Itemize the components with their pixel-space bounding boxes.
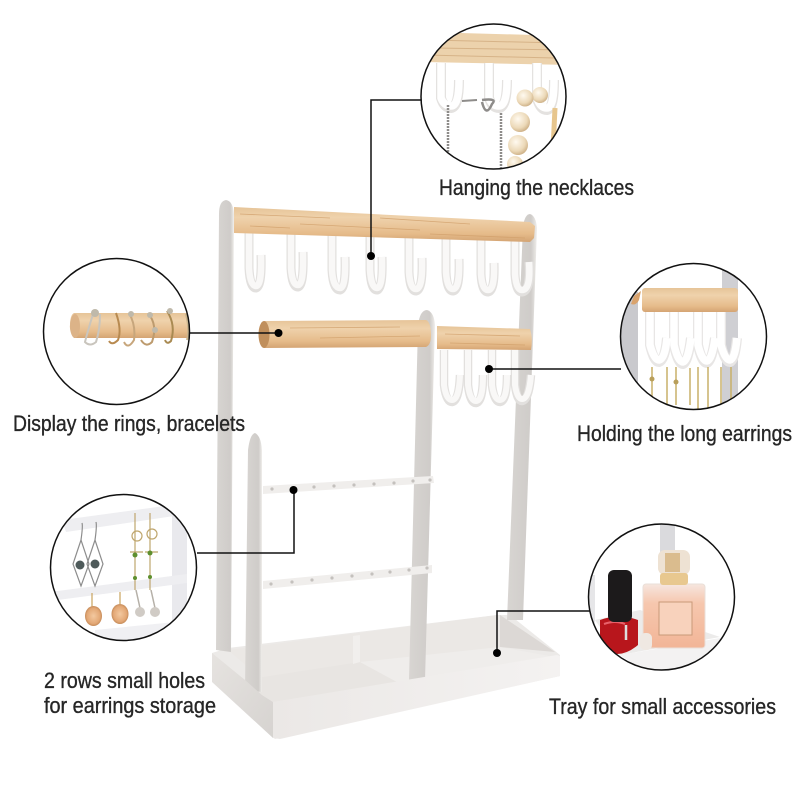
- label: tray: Tray for small accessories: [549, 694, 776, 719]
- right rear post: [507, 214, 537, 620]
- front left post: [245, 433, 262, 692]
- label: necklaces: Hanging the necklaces: [439, 175, 634, 200]
- left rear post: [216, 200, 234, 652]
- ring dowel: [258, 320, 431, 348]
- leader lines with dots: [190, 100, 621, 657]
- callout circle: earrings in holes: [50, 494, 198, 645]
- middle post: [409, 310, 435, 680]
- callout circle: necklaces: [421, 24, 570, 172]
- product: jewelry stand: [212, 200, 560, 739]
- label: earring holes: 2 rows small holes: [44, 668, 205, 693]
- label: earring holes: for earrings storage: [44, 693, 216, 718]
- label: earring holes: [44, 668, 216, 718]
- tray front rim: [212, 653, 560, 739]
- tray back and floor: [212, 615, 560, 739]
- callout circle: rings on dowel: [43, 258, 195, 405]
- upper earring bar: [263, 476, 434, 494]
- lower right hooks: [444, 350, 531, 403]
- short right dowel: [437, 326, 532, 350]
- top wooden dowel: [234, 207, 535, 242]
- callout circle: long earrings: [620, 263, 768, 411]
- lower earring bar: [263, 565, 432, 589]
- callout circle: tray items: [588, 523, 740, 675]
- label: rings and bracelets: Display the rings, bracelets: [13, 411, 245, 436]
- top row of hooks: [249, 233, 529, 292]
